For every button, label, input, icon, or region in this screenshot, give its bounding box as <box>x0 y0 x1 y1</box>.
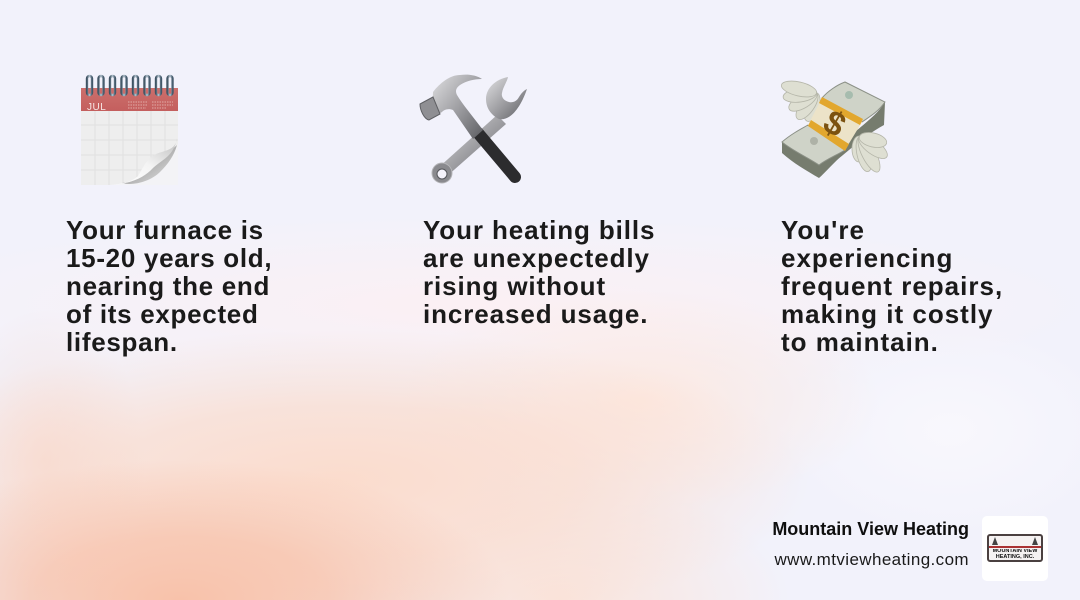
text: heating bills: rising without <box>423 271 606 301</box>
text: furnace age: Your furnace is <box>66 215 264 245</box>
icon: money with wings <box>781 80 888 178</box>
text: heating bills: increased usage. <box>423 299 648 329</box>
logo: Mountain View Heating: HEATING, INC. <box>996 554 1034 560</box>
text: frequent repairs: You're <box>781 215 865 245</box>
text: heating bills: Your heating bills <box>423 215 655 245</box>
text: furnace age: nearing the end <box>66 271 270 301</box>
icon: calendar <box>81 74 178 185</box>
text: frequent repairs: experiencing <box>781 243 953 273</box>
text: furnace age <box>66 215 272 357</box>
brand name: Mountain View Heating <box>772 519 969 539</box>
text: frequent repairs <box>781 215 1003 357</box>
text: frequent repairs: frequent repairs, <box>781 271 1003 301</box>
icon: calendar: JUL <box>87 102 106 113</box>
text: heating bills <box>423 215 655 329</box>
text: furnace age: of its expected <box>66 299 259 329</box>
text: frequent repairs: to maintain. <box>781 327 939 357</box>
text: furnace age: 15-20 years old, <box>66 243 272 273</box>
icon: money with wings: $ <box>817 103 852 145</box>
website url: www.mtviewheating.com <box>774 550 969 569</box>
icon: hammer and wrench <box>420 74 527 184</box>
text: furnace age: lifespan. <box>66 327 178 357</box>
text: frequent repairs: making it costly <box>781 299 994 329</box>
text: heating bills: are unexpectedly <box>423 243 650 273</box>
logo: Mountain View Heating <box>982 516 1048 581</box>
